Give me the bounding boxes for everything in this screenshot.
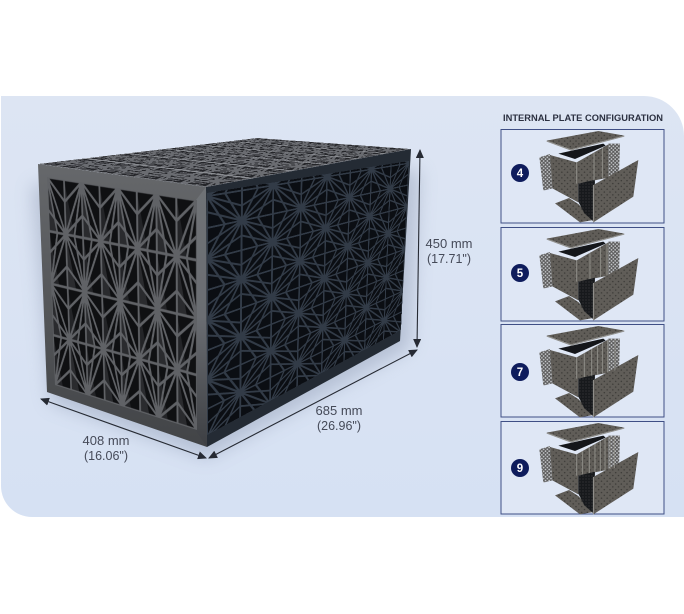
dimension label: width: 408 mm	[83, 433, 129, 448]
badge: 9	[511, 459, 529, 477]
dimension label: length: 685 mm	[316, 403, 362, 418]
dimension label: height: 450 mm	[426, 236, 472, 251]
badge: 5: 5	[517, 268, 524, 280]
crate frames	[38, 149, 411, 447]
panel: 4 plates	[501, 130, 664, 223]
arrow: width	[41, 399, 206, 458]
crate right face lattice	[207, 161, 409, 435]
badge: 9: 9	[517, 463, 523, 475]
heading: INTERNAL PLATE CONFIGURATION	[503, 113, 663, 123]
storage crate	[38, 138, 411, 447]
panel: 9 plates	[501, 422, 664, 514]
badge: 7	[511, 363, 529, 381]
crate left face lattice	[48, 178, 197, 430]
dimension label: width: (16.06")	[84, 449, 128, 463]
badge: 7: 7	[517, 367, 523, 379]
arrow: height	[417, 150, 420, 347]
panel: background	[1, 96, 684, 517]
dimension label: height: (17.71")	[427, 252, 471, 266]
dimension label: length: (26.96")	[317, 419, 361, 433]
badge: 4	[511, 164, 529, 182]
badge: 5	[511, 264, 529, 282]
crate top face lattice	[40, 138, 410, 187]
badge: 4: 4	[517, 168, 524, 180]
arrow: length	[209, 350, 417, 458]
panel: 5 plates	[501, 228, 664, 321]
panel: 7 plates	[501, 324, 664, 417]
